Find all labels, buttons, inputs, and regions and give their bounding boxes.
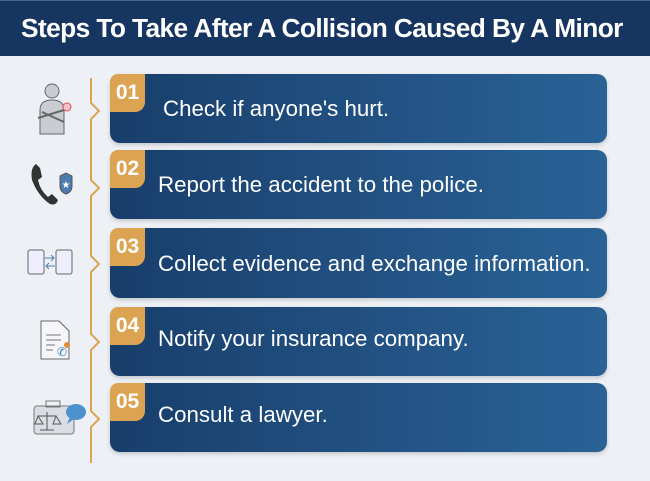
- card 2: 02: [116, 157, 139, 180]
- timeline line with chevrons: [90, 78, 100, 463]
- card 3: Collect evidence and exchange information.: [158, 251, 591, 276]
- icon: phone and police badge: ★: [62, 180, 71, 191]
- card 2: Report the accident to the police.: [158, 172, 484, 197]
- icon: briefcase with scales and chat: [34, 400, 86, 434]
- icon: document with phone: ✆: [57, 345, 67, 359]
- title: [0, 0, 650, 56]
- icon: hurt person: [38, 84, 72, 134]
- card 2: [110, 150, 607, 219]
- card 5: [110, 383, 607, 452]
- card 4: Notify your insurance company.: [158, 326, 469, 351]
- icon: devices exchange: [28, 250, 72, 274]
- card 5: 05: [116, 390, 139, 413]
- card 4: 04: [116, 314, 139, 337]
- icon: phone and police badge: [32, 164, 72, 204]
- card 4: [110, 307, 607, 376]
- card 1: [110, 74, 607, 143]
- card 1: Check if anyone's hurt.: [163, 96, 389, 121]
- card 3: [110, 228, 607, 298]
- card 1: 01: [116, 81, 139, 104]
- card 3: 03: [116, 235, 139, 258]
- title: Steps To Take After A Collision Caused By A Minor: [21, 13, 623, 43]
- icon: document with phone: [40, 320, 70, 360]
- card 5: Consult a lawyer.: [158, 402, 328, 427]
